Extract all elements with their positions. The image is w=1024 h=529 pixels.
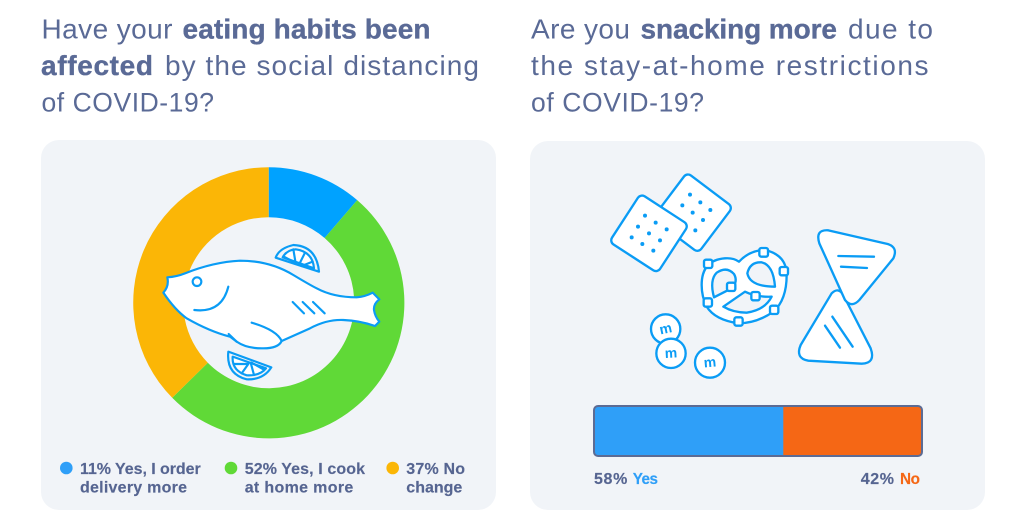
icon: back cracker bbox=[653, 173, 733, 253]
legend: 11% delivery: 11% Yes, I order bbox=[80, 461, 201, 478]
bar label: yes bbox=[594, 471, 658, 488]
heading: snacking question: Are you bbox=[531, 14, 630, 44]
legend: 37% no change bbox=[386, 461, 465, 496]
bar label: yes: 58% bbox=[594, 471, 627, 488]
donut segment: 11% delivery bbox=[269, 167, 357, 238]
panel: eating habits bbox=[41, 140, 496, 510]
legend: 11% delivery bbox=[60, 461, 201, 496]
icon: fish with lemon slices bbox=[163, 245, 379, 379]
heading: snacking question: due to bbox=[848, 14, 933, 44]
donut chart bbox=[133, 167, 404, 438]
legend: 37% no change: 37% No bbox=[406, 461, 465, 478]
panel: snacking bbox=[530, 141, 985, 510]
icon: bottom lemon slice bbox=[228, 352, 271, 379]
heading: eating habits question: affected bbox=[41, 50, 153, 81]
bar label: no: 42% bbox=[861, 471, 894, 488]
heading: eating habits question: eating habits been bbox=[182, 14, 430, 44]
donut segment: 37% no change bbox=[133, 167, 269, 398]
donut segment: 52% cook at home bbox=[172, 200, 404, 438]
icon: front cracker bbox=[609, 194, 689, 273]
heading: eating habits question bbox=[41, 14, 479, 118]
legend: 37% no change: change bbox=[406, 480, 462, 496]
fish body bbox=[163, 261, 379, 348]
heading: snacking question bbox=[531, 14, 933, 118]
fish details bbox=[193, 277, 325, 342]
icon: top chip bbox=[818, 230, 895, 304]
bar chart: 58% yes, 42% no bbox=[594, 406, 922, 456]
heading: snacking question: the stay-at-home restrictions bbox=[531, 50, 928, 81]
bar label: yes: Yes bbox=[633, 471, 658, 488]
legend: 52% cook at home bbox=[225, 461, 365, 496]
icon: candies: m bbox=[658, 319, 673, 337]
legend: 52% cook at home: at home more bbox=[245, 480, 353, 496]
heading: snacking question: snacking more bbox=[640, 14, 837, 44]
bar label: no bbox=[861, 471, 920, 488]
icon: candies: m bbox=[664, 344, 678, 361]
heading: eating habits question: by the social distancing bbox=[165, 50, 479, 81]
bar label: no: No bbox=[900, 471, 920, 488]
icon: candies: m bbox=[703, 353, 717, 371]
heading: eating habits question: of COVID-19? bbox=[42, 88, 214, 118]
icon: snacks illustration bbox=[609, 173, 895, 378]
heading: snacking question: of COVID-19? bbox=[531, 88, 704, 118]
icon: candies bbox=[651, 314, 725, 378]
legend: 11% delivery: delivery more bbox=[80, 480, 187, 496]
heading: eating habits question: Have your bbox=[42, 14, 172, 44]
icon: bottom chip bbox=[799, 290, 872, 364]
icon: top lemon slice bbox=[276, 245, 319, 272]
icon: pretzel bbox=[702, 248, 788, 326]
legend: 52% cook at home: 52% Yes, I cook bbox=[245, 461, 365, 478]
